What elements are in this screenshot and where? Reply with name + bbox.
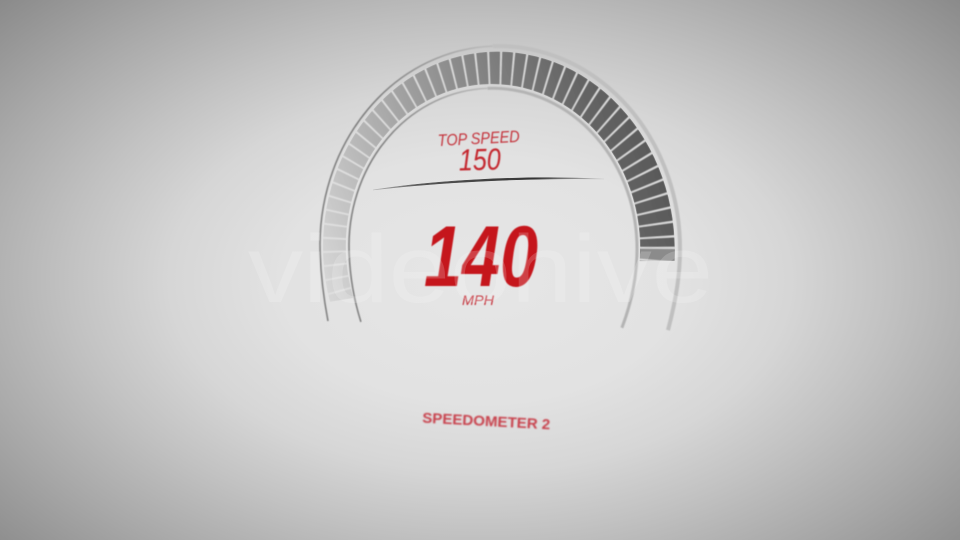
gauge dial	[318, 45, 682, 331]
watermark: videohive	[248, 216, 713, 323]
inner rim left	[344, 88, 495, 322]
outer rim right	[493, 40, 683, 336]
top speed label: TOP SPEED	[437, 127, 520, 150]
inner rim right	[487, 83, 640, 332]
needle line	[373, 178, 604, 190]
speed unit: MPH	[462, 293, 494, 308]
gauge title: SPEEDOMETER 2	[422, 410, 551, 433]
top speed value: 150	[458, 141, 501, 178]
outer rim left	[313, 46, 502, 321]
current speed value: 140	[424, 209, 538, 305]
speed bar segments	[323, 52, 675, 302]
